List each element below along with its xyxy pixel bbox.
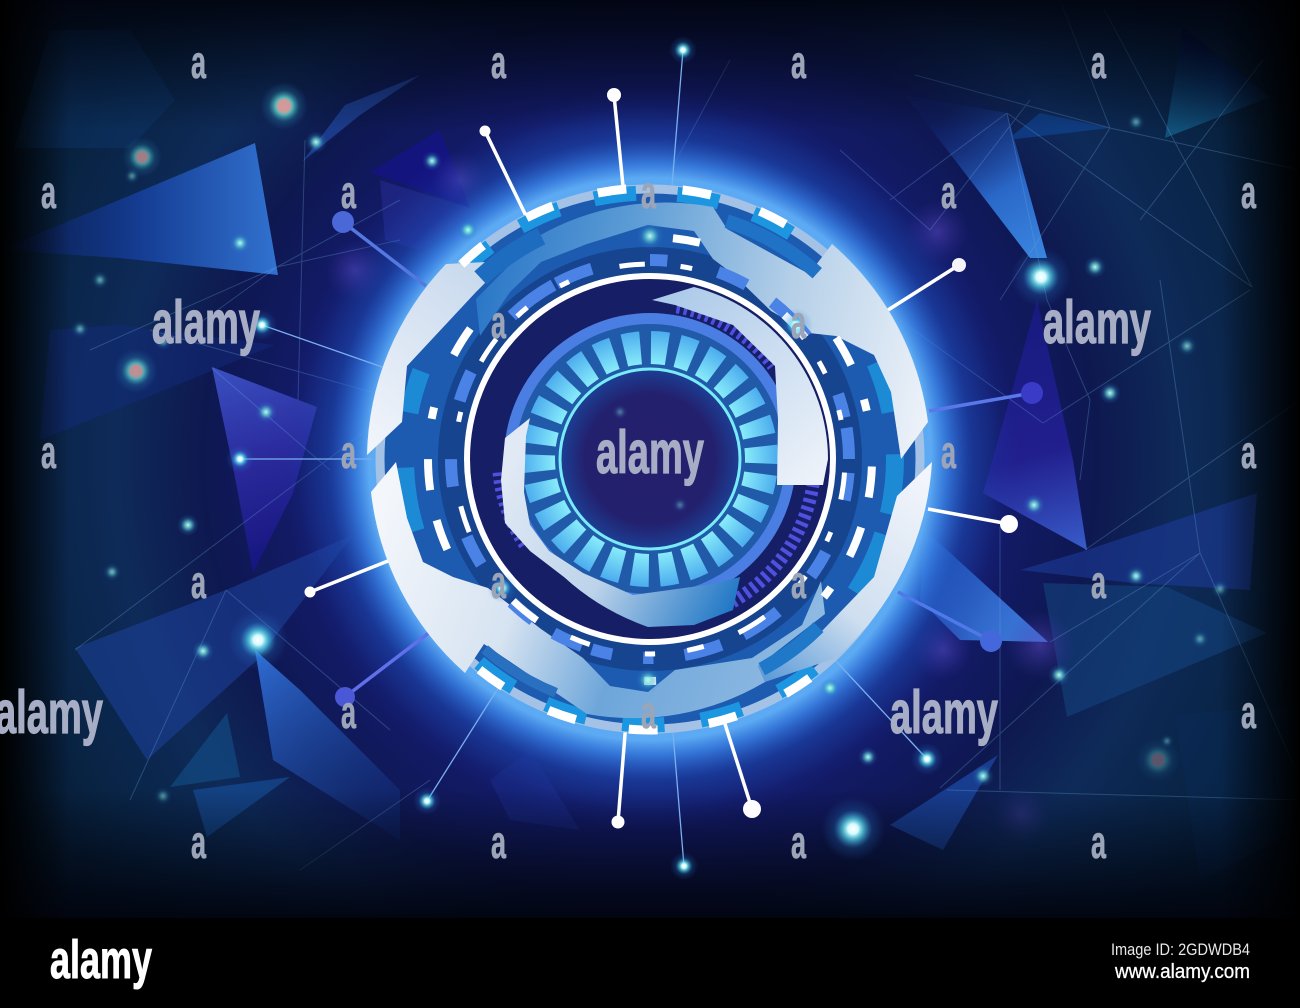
spoke: white top xyxy=(607,88,623,186)
purple haze blobs xyxy=(325,152,1075,843)
swoosh: lower right band xyxy=(758,462,932,682)
connector spokes xyxy=(240,50,1043,866)
image id: Image ID: 2GDWDB4 xyxy=(1111,940,1250,959)
inner swoosh: top right xyxy=(652,287,828,485)
outer thin ring xyxy=(380,189,920,729)
watermark: repeated small a: a xyxy=(791,556,806,608)
swoosh: left band xyxy=(367,261,507,455)
watermark: repeated small a: a xyxy=(641,166,656,218)
spoke: white right upper xyxy=(888,258,966,310)
watermark: repeated small a: a xyxy=(341,426,356,478)
watermark: upper left alamy: alamy xyxy=(152,289,260,356)
spoke: white bottom left xyxy=(612,722,626,828)
spoke: white upper left xyxy=(480,126,528,220)
spoke: blue lower left xyxy=(335,632,430,707)
watermark: repeated small a: a xyxy=(791,296,806,348)
glowing particles xyxy=(71,36,1229,880)
main HUD ring xyxy=(367,184,932,734)
watermark: repeated small a: a xyxy=(191,556,206,608)
spoke: blue right xyxy=(929,382,1043,411)
watermark: center alamy: alamy xyxy=(596,419,704,486)
dark inner disc xyxy=(469,278,831,640)
watermark: lower left alamy: alamy xyxy=(0,679,103,746)
watermark: repeated small a: a xyxy=(191,816,206,868)
watermark: repeated small a: a xyxy=(1241,166,1256,218)
watermark: repeated small a: a xyxy=(341,166,356,218)
watermark: repeated small a: a xyxy=(191,36,206,88)
ring halo glow xyxy=(280,89,1020,829)
spoke: thin lines with glowing ends xyxy=(240,50,927,866)
watermark: repeated small a: a xyxy=(491,36,506,88)
watermark: repeated small a: a xyxy=(1091,816,1106,868)
footer logo: alamy xyxy=(50,930,152,990)
watermark: repeated small a: a xyxy=(41,166,56,218)
swoosh: lower left and bottom band xyxy=(371,462,825,718)
ring base disc xyxy=(380,189,920,729)
center glowing ring xyxy=(560,369,740,549)
watermark: repeated small a: a xyxy=(791,816,806,868)
watermark: repeated small a: a xyxy=(1241,426,1256,478)
white dashes inner xyxy=(372,181,928,737)
watermark: repeated small a: a xyxy=(491,556,506,608)
watermark: repeated small a: a xyxy=(341,686,356,738)
watermark: repeated small a: a xyxy=(791,36,806,88)
spoke: white left lower xyxy=(304,561,388,598)
cyan ring highlights and blue patches xyxy=(274,83,1026,835)
dashes between rings xyxy=(267,76,1033,842)
watermark: repeated small a: a xyxy=(491,816,506,868)
watermark: repeated small a: a xyxy=(1091,36,1106,88)
watermark: lower right alamy: alamy xyxy=(890,679,998,746)
watermark: repeated small a: a xyxy=(1091,556,1106,608)
watermark: repeated small a: a xyxy=(641,686,656,738)
watermark: repeated small a: a xyxy=(1241,686,1256,738)
website: www.alamy.com xyxy=(1114,961,1250,983)
blue dashes xyxy=(369,178,931,740)
inner swoosh: lower left xyxy=(501,418,740,627)
spoke: white bottom right xyxy=(725,724,761,818)
watermark: repeated small a: a xyxy=(941,426,956,478)
footer bar xyxy=(0,918,1300,1008)
spoke: white right lower xyxy=(928,509,1018,533)
watermark: repeated small a: a xyxy=(41,426,56,478)
cyan radial bars xyxy=(527,336,773,582)
center disc xyxy=(561,370,739,548)
spoke: blue lower right xyxy=(898,592,1002,652)
watermark: repeated small a xyxy=(41,36,1256,868)
purple tick marks xyxy=(485,294,815,624)
ring sparkles xyxy=(459,221,839,697)
darker bar track xyxy=(515,324,785,594)
white dashes outer xyxy=(340,149,960,769)
dark mid band xyxy=(438,247,862,671)
blue strips on swooshes xyxy=(299,108,1001,810)
white outer ring segments xyxy=(267,76,1033,842)
medium blue disc xyxy=(504,313,796,605)
spoke: blue upper left xyxy=(332,211,426,286)
watermark: repeated small a: a xyxy=(491,296,506,348)
watermark: upper right alamy: alamy xyxy=(1043,289,1151,356)
white inner ring xyxy=(467,276,833,642)
watermark: repeated small a: a xyxy=(941,166,956,218)
swoosh: top and right band xyxy=(476,202,928,459)
